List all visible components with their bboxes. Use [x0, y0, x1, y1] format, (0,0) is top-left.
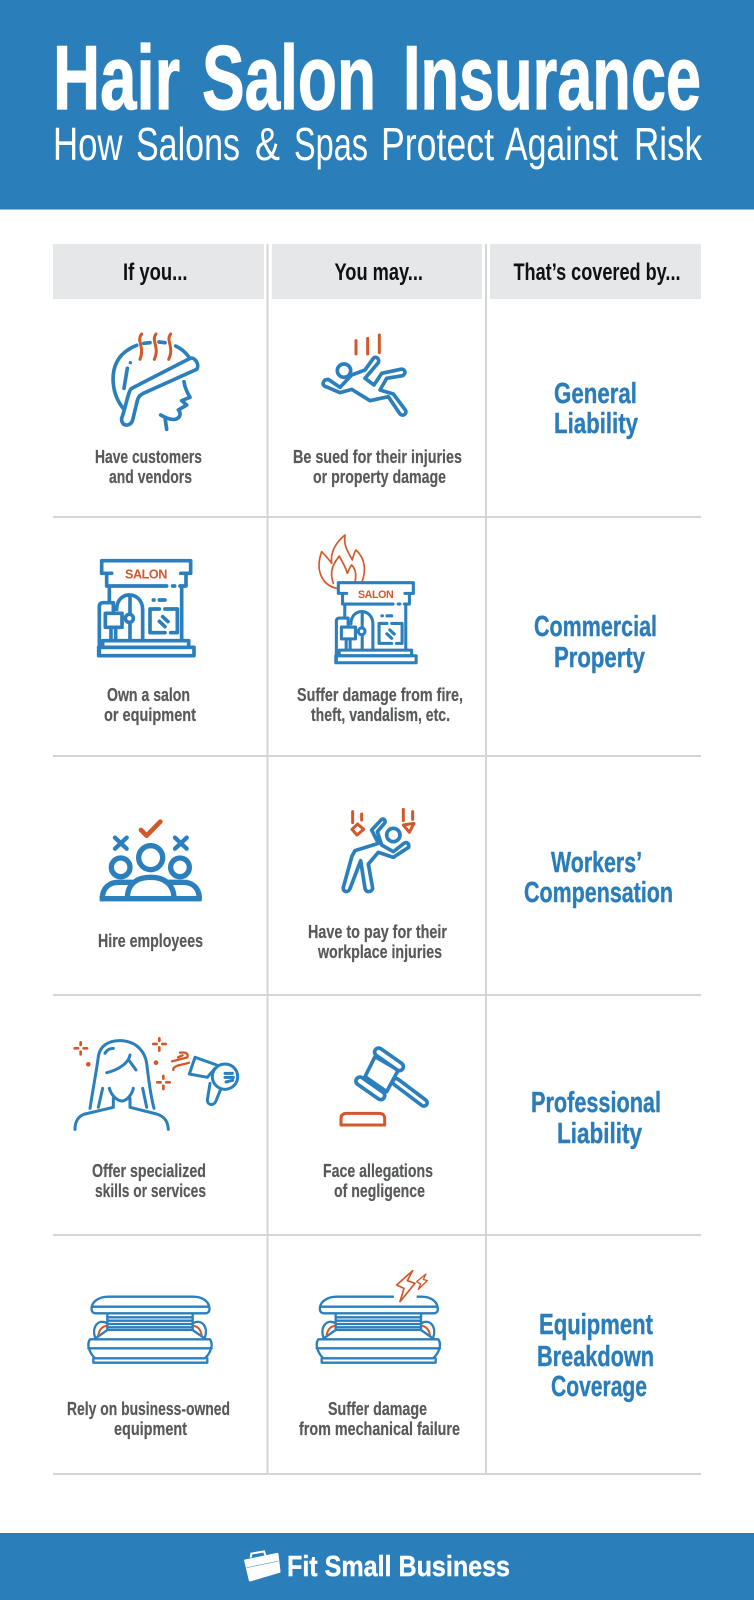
header banner	[0, 0, 754, 210]
icon: falling person	[323, 335, 406, 415]
icon: head with hot towel	[113, 334, 198, 429]
label: mechanical failure	[299, 1399, 460, 1439]
icon: briefcase logo	[245, 1551, 279, 1580]
label: be sued: or property damage	[313, 467, 446, 487]
icon: salon storefront	[99, 561, 194, 656]
icon: salon storefront: SALON	[125, 568, 167, 582]
label: suffer damage from fire	[297, 685, 463, 725]
title	[53, 28, 701, 129]
row 1: general liability	[95, 334, 638, 487]
subtitle: Salons	[136, 118, 240, 170]
coverage: professional liability: Professional	[531, 1087, 661, 1119]
row 5: equipment breakdown	[67, 1271, 654, 1439]
subtitle: &	[255, 118, 280, 170]
icon: gavel	[341, 1046, 429, 1125]
subtitle: How	[53, 118, 123, 170]
column headers: If you...	[123, 259, 188, 286]
coverage: equipment breakdown: Equipment	[539, 1309, 653, 1341]
label: offer specialized skills: Offer specialized	[92, 1161, 206, 1181]
label: have customers: and vendors	[109, 467, 192, 487]
label: have customers	[95, 447, 202, 487]
label: offer specialized skills	[92, 1161, 206, 1201]
icon: stylist with hair dryer	[75, 1038, 238, 1129]
coverage: equipment breakdown	[537, 1309, 654, 1403]
icon: tanning bed	[88, 1297, 212, 1363]
coverage: equipment breakdown: Coverage	[551, 1371, 647, 1403]
label: rely on equipment: Rely on business-owned	[67, 1399, 230, 1419]
label: mechanical failure: Suffer damage	[328, 1399, 427, 1419]
row 4: professional liability	[75, 1038, 661, 1201]
label: own a salon: or equipment	[104, 705, 196, 725]
coverage: professional liability: Liability	[557, 1118, 642, 1150]
label: rely on equipment: equipment	[114, 1419, 187, 1439]
label: offer specialized skills: skills or services	[95, 1181, 206, 1201]
coverage: workers compensation: Compensation	[524, 877, 673, 909]
title: Hair	[53, 28, 180, 129]
coverage: general liability	[554, 378, 638, 440]
coverage: workers compensation: Workers’	[551, 847, 642, 879]
row 3: workers compensation	[98, 809, 673, 962]
coverage: commercial property	[534, 611, 657, 674]
subtitle	[53, 118, 703, 170]
logo wordmark: Fit Small Business	[287, 1551, 510, 1583]
coverage: workers compensation	[524, 847, 673, 909]
label: pay for workplace injuries	[308, 922, 447, 962]
label: own a salon: Own a salon	[107, 685, 190, 705]
label: be sued: Be sued for their injuries	[293, 447, 462, 467]
label: mechanical failure: from mechanical failure	[299, 1419, 460, 1439]
coverage: professional liability	[531, 1087, 661, 1150]
column headers	[53, 244, 701, 299]
subtitle: Risk	[634, 118, 703, 170]
coverage: commercial property: Property	[554, 642, 645, 674]
footer banner	[0, 1533, 754, 1600]
subtitle: Against	[505, 118, 618, 170]
icon: salon on fire: SALON	[358, 589, 394, 601]
table grid lines	[53, 244, 701, 1475]
icon: tanning bed with sparks	[317, 1271, 440, 1363]
coverage: general liability: Liability	[554, 408, 638, 440]
subtitle: Protect	[381, 118, 494, 170]
label: rely on equipment	[67, 1399, 230, 1439]
column headers: That’s covered by...	[514, 259, 680, 286]
label: own a salon	[104, 685, 196, 725]
label: face allegations	[323, 1161, 433, 1201]
label: pay for workplace injuries: Have to pay for their	[308, 922, 447, 942]
label: be sued	[293, 447, 462, 487]
label: hire employees: Hire employees	[98, 931, 203, 951]
label: suffer damage from fire: theft, vandalism, etc.	[311, 705, 450, 725]
column headers: You may...	[334, 259, 423, 286]
icon: salon on fire	[319, 535, 416, 663]
title: Salon	[202, 28, 376, 129]
coverage: general liability: General	[554, 378, 637, 410]
coverage: equipment breakdown: Breakdown	[537, 1341, 654, 1373]
icon: injured worker	[343, 809, 414, 892]
label: face allegations: of negligence	[334, 1181, 425, 1201]
coverage: commercial property: Commercial	[534, 611, 657, 643]
label: face allegations: Face allegations	[323, 1161, 433, 1181]
label: have customers: Have customers	[95, 447, 202, 467]
row 2: commercial property	[99, 535, 657, 725]
subtitle: Spas	[294, 118, 368, 170]
label: suffer damage from fire: Suffer damage from fire,	[297, 685, 463, 705]
label: pay for workplace injuries: workplace injuries	[317, 942, 442, 962]
icon: employee candidates	[100, 822, 202, 899]
